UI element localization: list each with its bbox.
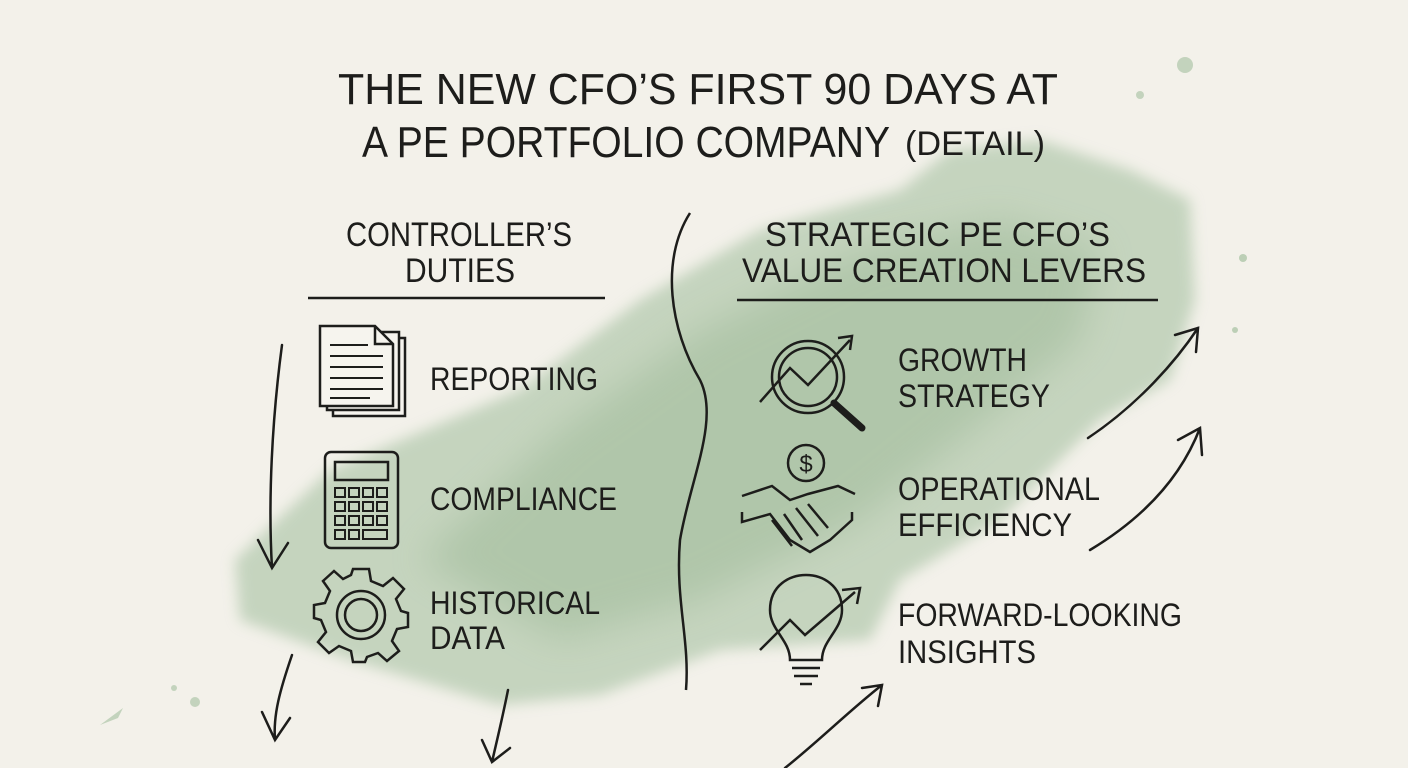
heading: strategic levers: VALUE CREATION LEVERS — [742, 252, 1146, 290]
heading: controller's duties — [308, 216, 605, 298]
text: growth strategy: GROWTH — [898, 342, 1027, 378]
text: forward-looking insights: INSIGHTS — [898, 634, 1036, 670]
icon: gear — [314, 569, 408, 662]
divider curve — [672, 213, 707, 690]
text: growth strategy: STRATEGY — [898, 378, 1050, 414]
icon: magnifier growth — [760, 336, 862, 428]
green watercolor wash — [100, 57, 1247, 725]
text: forward-looking insights — [898, 597, 1182, 670]
title: A PE PORTFOLIO COMPANY — [362, 118, 890, 167]
text: operational efficiency — [898, 471, 1100, 543]
title: (DETAIL) — [905, 125, 1045, 163]
text: historical data: HISTORICAL — [430, 585, 600, 621]
icon: handshake with dollar — [742, 445, 855, 552]
heading: strategic levers — [737, 216, 1158, 300]
text: historical data: DATA — [430, 620, 506, 656]
icon: handshake with dollar: $ — [799, 451, 813, 478]
text: reporting: REPORTING — [430, 361, 598, 397]
text: historical data — [430, 585, 600, 656]
heading: controller's duties: CONTROLLER’S — [346, 216, 572, 254]
text: compliance: COMPLIANCE — [430, 481, 617, 517]
text: operational efficiency: EFFICIENCY — [898, 507, 1072, 543]
icon: lightbulb with arrow — [760, 575, 860, 684]
icon: documents — [320, 326, 405, 416]
arrows — [258, 328, 1202, 768]
title: THE NEW CFO’S FIRST 90 DAYS AT — [338, 65, 1058, 114]
icon: calculator — [325, 452, 398, 548]
heading: strategic levers: STRATEGIC PE CFO’S — [765, 216, 1110, 254]
title — [338, 65, 1058, 167]
heading: controller's duties: DUTIES — [405, 252, 515, 290]
text: operational efficiency: OPERATIONAL — [898, 471, 1100, 507]
text: growth strategy — [898, 342, 1050, 414]
text: forward-looking insights: FORWARD-LOOKING — [898, 597, 1182, 633]
